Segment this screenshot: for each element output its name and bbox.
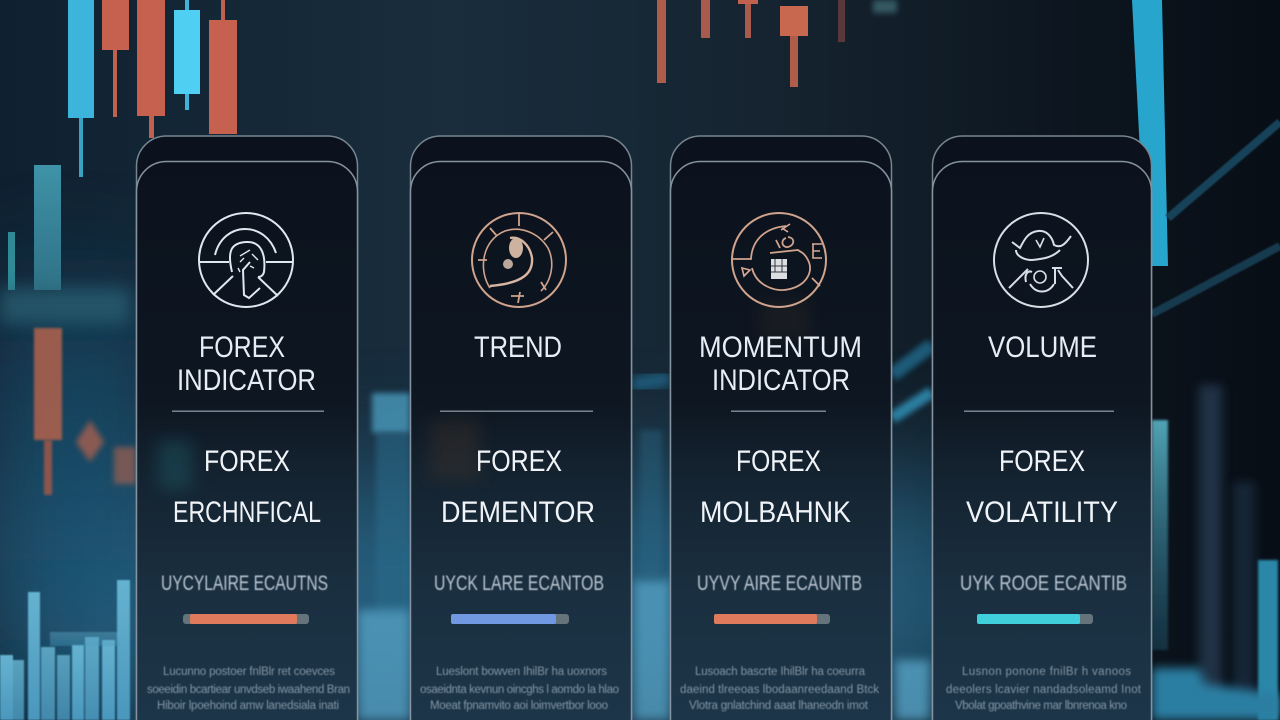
description text <box>147 666 350 712</box>
description text: Moeat fpnamvito aoi loimvertbor looo <box>430 700 608 712</box>
icon: copper cycle circle <box>732 213 826 307</box>
description text: Lusoach bascrte IhilBlr ha coeurra <box>695 666 866 678</box>
description text <box>680 666 879 712</box>
candlesticks: top left <box>68 0 237 177</box>
heading: momentum indicator: MOMENTUM <box>699 331 862 364</box>
description text: soeeidin bcartiear unvdseb iwaahend Bran <box>147 684 350 696</box>
panel: card 2 trend <box>410 136 632 720</box>
panel: card 3 momentum indicator <box>670 136 892 720</box>
subheading: forex volatility: FOREX <box>999 445 1085 478</box>
subheading: forex molbahnk <box>700 445 851 529</box>
trend bar and diagonal lines: right <box>632 0 1280 720</box>
icon: abstract mask circle <box>994 213 1088 307</box>
description text <box>946 666 1142 712</box>
label: UYK ROOE ECANTIB <box>960 572 1127 595</box>
description text: Vlotra gnlatchind aaat lhaneodn imot <box>689 700 869 712</box>
description text: deeolers lcavier nandadsoleamd Inot <box>946 684 1142 696</box>
description text: Lueslont bowven IhilBr ha uoxnors <box>436 666 607 678</box>
panel: card 1 forex indicator <box>136 136 358 720</box>
description text: osaeidnta kevnun oincghs l aomdo la hlao <box>420 684 619 696</box>
progress bar blue <box>451 614 569 624</box>
label: UYCK LARE ECANTOB <box>434 572 604 595</box>
subheading: forex technical: ERCHNFICAL <box>173 496 321 529</box>
heading: forex indicator: INDICATOR <box>177 364 316 397</box>
subheading: forex volatility: VOLATILITY <box>966 496 1118 529</box>
description text <box>420 666 619 712</box>
panel: card 4 volume <box>932 136 1152 720</box>
description text: Hiboir lpoehoind amw lanedsiala inati <box>157 700 339 712</box>
blurred columns between cards <box>358 393 930 720</box>
subheading: forex dementor: FOREX <box>476 445 562 478</box>
description text: Vbolat gpoathvine mar lbnrenoa kno <box>955 700 1127 712</box>
icon: head in radar circle <box>199 213 293 307</box>
heading: forex indicator <box>177 331 316 397</box>
subheading: forex dementor: DEMENTOR <box>441 496 595 529</box>
subheading: forex volatility <box>966 445 1118 529</box>
progress bar orange <box>183 614 309 624</box>
subheading: forex technical <box>173 445 321 529</box>
heading: momentum indicator <box>699 331 862 397</box>
subheading: forex molbahnk: FOREX <box>736 445 821 478</box>
subheading: forex technical: FOREX <box>204 445 290 478</box>
heading: trend: TREND <box>474 331 562 364</box>
subheading: forex molbahnk: MOLBAHNK <box>700 496 851 529</box>
description text: Lusnon ponone fnilBr h vanoos <box>962 666 1131 678</box>
progress bar cyan <box>977 614 1093 624</box>
description text: daeind tlreeoas lbodaanreedaand Btck <box>680 684 879 696</box>
subheading: forex dementor <box>441 445 595 529</box>
label: UYCYLAIRE ECAUTNS <box>161 572 328 595</box>
icon: copper compass circle <box>472 213 566 307</box>
description text: Lucunno postoer fnlBlr ret coevces <box>163 666 335 678</box>
heading: momentum indicator: INDICATOR <box>712 364 850 397</box>
heading: forex indicator: FOREX <box>199 331 285 364</box>
volume bars: bottom left <box>0 580 130 720</box>
candlesticks: top centre <box>657 0 897 87</box>
label: UYVY AIRE ECAUNTB <box>697 572 862 595</box>
candlesticks: left faded <box>0 165 136 495</box>
progress bar orange <box>714 614 830 624</box>
heading: volume: VOLUME <box>988 331 1097 364</box>
